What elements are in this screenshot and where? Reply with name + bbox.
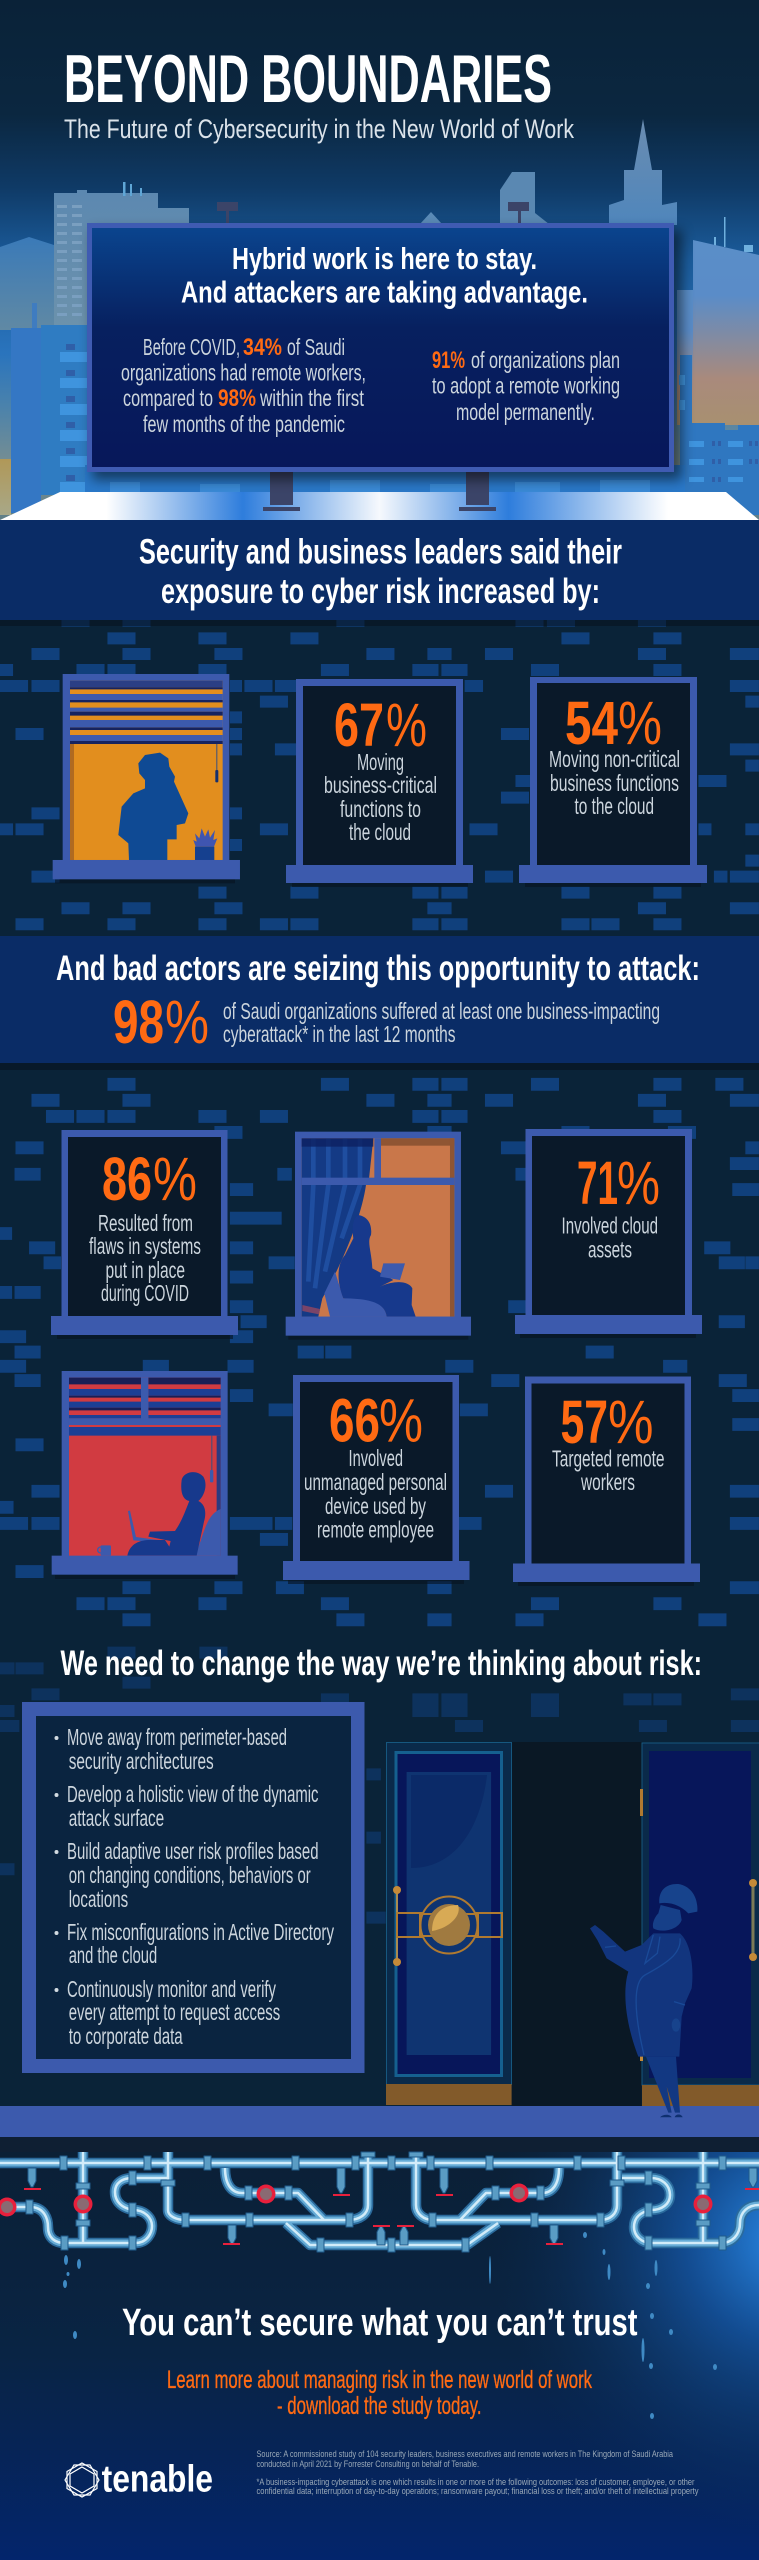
logo mark [65, 2463, 99, 2497]
pipes network [0, 2152, 759, 2252]
billboard posts [263, 472, 496, 511]
98% stat: % [165, 988, 209, 1056]
window: 57% stat: 57 [560, 1388, 608, 1456]
call to action [167, 2366, 592, 2420]
list text: Continuously monitor and verify [67, 1976, 276, 2002]
window: 66% stat: unmanaged personal [304, 1469, 447, 1495]
window: 67% stat: functions to [340, 796, 421, 822]
list text: Fix misconfigurations in Active Directory [67, 1919, 334, 1945]
billboard stat: remote workers: Before COVID, [143, 334, 240, 360]
98% stat [113, 988, 660, 1056]
chair [195, 1509, 221, 1556]
billboard heading: And attackers are taking advantage. [181, 274, 588, 310]
right door [640, 1743, 759, 2106]
list text: attack surface [69, 1805, 164, 1831]
mug [98, 1545, 111, 1556]
billboard stat: permanent remote: 91% [432, 347, 465, 374]
window: 71% stat: assets [588, 1236, 632, 1262]
panel: recommendations list [22, 1702, 364, 2073]
billboard stat: remote workers: compared to [123, 385, 213, 411]
window: 71% stat: 71 [577, 1149, 618, 1217]
pipe highlight [0, 2152, 759, 2245]
window: person with tablet behind curtain [286, 1132, 471, 1340]
open doorway [512, 1742, 642, 2106]
list text: security architectures [69, 1748, 214, 1774]
billboard stat: permanent remote: to adopt a remote working [432, 372, 620, 398]
window: 57% stat [513, 1376, 700, 1586]
window: 67% stat: % [386, 691, 427, 759]
window: 67% stat: the cloud [349, 819, 411, 845]
source notes [256, 2449, 699, 2497]
band shadows [0, 620, 759, 1070]
list text [67, 1724, 334, 2049]
window: 54% stat: Moving non-critical [549, 746, 680, 772]
person silhouette [118, 753, 188, 860]
footer background [0, 2152, 759, 2560]
window: 66% stat [283, 1375, 470, 1584]
window: 86% stat: flaws in systems [89, 1233, 201, 1259]
window: 57% stat: Targeted remote [552, 1446, 664, 1472]
pipe nozzles with red caps [24, 2168, 759, 2245]
brick wall upper [0, 620, 759, 930]
window: 57% stat: workers [580, 1469, 635, 1495]
band: exposure heading [0, 520, 759, 620]
billboard stat: remote workers [121, 334, 366, 437]
billboard stat: remote workers: 34% [243, 334, 282, 361]
main title: The Future of Cybersecurity in the New World of Work [64, 114, 574, 144]
door handle [393, 1886, 502, 1966]
window: 67% stat: business-critical [324, 772, 437, 798]
window: 71% stat [515, 1129, 702, 1338]
water drips [63, 2232, 717, 2419]
window: 66% stat: device used by [325, 1493, 426, 1519]
window: 54% stat: business functions [550, 770, 679, 796]
armchair [324, 1272, 387, 1317]
window: 67% stat: Moving [357, 749, 404, 775]
curtain [302, 1138, 373, 1317]
window: person on phone [53, 674, 240, 883]
billboard ledge [0, 492, 759, 520]
list text: Build adaptive user risk profiles based [67, 1838, 318, 1864]
window: 67% stat [286, 679, 473, 887]
billboard stat: remote workers: within the first [259, 385, 364, 411]
billboard panel [90, 226, 682, 480]
billboard heading: Hybrid work is here to stay. [232, 241, 537, 276]
window: 86% stat: 86 [102, 1145, 152, 1213]
window: 86% stat: during COVID [101, 1280, 189, 1306]
tenable logo: tenable [102, 2458, 213, 2500]
billboard lamps [217, 202, 529, 223]
tenable logo [65, 2458, 213, 2500]
floor [0, 2106, 759, 2137]
billboard stat: remote workers: organizations had remote workers, [121, 360, 366, 386]
doorman figure [590, 1884, 697, 2117]
window: 86% stat: Resulted from [98, 1210, 193, 1236]
window: 54% stat [519, 677, 707, 887]
billboard stat: permanent remote: model permanently. [456, 399, 595, 425]
laptop [128, 1511, 165, 1543]
billboard heading [181, 241, 588, 310]
window: 71% stat: Involved cloud [562, 1212, 658, 1238]
building cluster left [0, 182, 189, 515]
list text: every attempt to request access [69, 1999, 280, 2025]
window: 67% stat: 67 [334, 691, 384, 759]
billboard stat: remote workers: few months of the pandemic [143, 411, 345, 437]
window: 86% stat [51, 1130, 238, 1339]
window: 66% stat: % [379, 1386, 423, 1454]
source notes: conducted in April 2021 by Forrester Consulting on behalf of Tenable. [256, 2459, 479, 2470]
pipe flanges [26, 2152, 726, 2252]
brick wall lower, fading [0, 1647, 759, 1924]
dark strip under floor [0, 2137, 759, 2152]
window: 54% stat: % [618, 689, 662, 757]
bullets [54, 1736, 58, 1992]
tablet [380, 1263, 405, 1280]
seated person [339, 1215, 416, 1317]
billboard stat: permanent remote [432, 347, 620, 425]
billboard stat: permanent remote: of organizations plan [471, 347, 620, 373]
billboard stat: remote workers: 98% [218, 385, 256, 412]
list text: on changing conditions, behaviors or [69, 1862, 311, 1888]
left door [386, 1742, 512, 2105]
window: 54% stat: to the cloud [574, 793, 654, 819]
list text: and the cloud [69, 1942, 157, 1968]
98% stat: cyberattack* in the last 12 months [223, 1021, 456, 1047]
window: 57% stat: % [608, 1388, 654, 1456]
building cluster right [420, 119, 759, 515]
window: 71% stat: % [617, 1149, 660, 1217]
pipe outer [0, 2152, 759, 2245]
seated person [127, 1472, 206, 1556]
list text: Develop a holistic view of the dynamic [67, 1781, 318, 1807]
band: bad actors [0, 936, 759, 1063]
plant [193, 828, 217, 861]
call to action: - download the study today. [277, 2392, 482, 2420]
window: 66% stat: remote employee [317, 1516, 434, 1542]
window: 66% stat: 66 [329, 1386, 380, 1454]
window: 86% stat: % [153, 1145, 197, 1213]
98% stat: 98 [113, 988, 164, 1056]
right door handle [749, 1879, 757, 1961]
brick wall middle [0, 1078, 759, 1626]
city base strip [85, 465, 685, 495]
pipe valves: red wheels [0, 2184, 712, 2216]
band: exposure heading: exposure to cyber risk increased by: [161, 572, 600, 611]
list text: to corporate data [69, 2023, 183, 2049]
pipe middle [0, 2152, 759, 2245]
window: 54% stat: 54 [565, 689, 618, 757]
window: 66% stat: Involved [348, 1445, 403, 1471]
header city scene [0, 0, 759, 520]
main title [64, 41, 574, 144]
window: 86% stat: put in place [106, 1257, 185, 1283]
list text: locations [69, 1886, 128, 1912]
billboard stat: remote workers: of Saudi [287, 334, 345, 360]
list text: Move away from perimeter-based [67, 1724, 287, 1750]
window: person with laptop [52, 1371, 238, 1579]
